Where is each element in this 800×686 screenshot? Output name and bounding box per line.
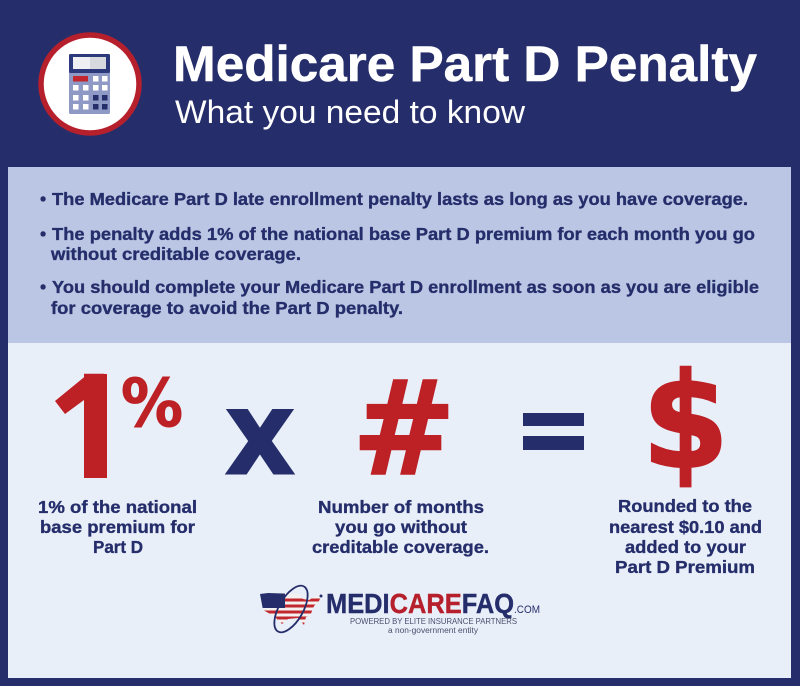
logo tagline: POWERED BY ELITE INSURANCE PARTNERS <box>350 617 518 626</box>
text: enroll as soon as eligible: You should complete your Medicare Part D enrollment as soon as you are eligible <box>52 277 759 297</box>
caption: rounded: Rounded to the <box>618 496 752 516</box>
text: enroll as soon as eligible <box>51 277 759 318</box>
caption: months: Number of months <box>318 497 484 517</box>
caption: one percent <box>38 497 197 557</box>
one percent symbol <box>55 374 182 478</box>
bullet 1: • <box>40 189 46 209</box>
logo .com: .COM <box>514 604 540 616</box>
caption: one percent: base premium for <box>40 517 195 537</box>
caption: one percent: Part D <box>93 537 143 557</box>
dollar sign: $ <box>642 345 729 499</box>
bullet 3: • <box>40 277 46 297</box>
logo disclaimer: a non-government entity <box>388 626 478 635</box>
multiply sign: x <box>224 364 296 502</box>
panel: key facts <box>8 167 791 343</box>
subtitle: What you need to know <box>175 94 526 130</box>
number sign: # <box>352 352 456 505</box>
caption: months <box>312 497 489 557</box>
text: enroll as soon as eligible: for coverage to avoid the Part D penalty. <box>51 298 403 318</box>
text: penalty amount: The penalty adds 1% of the national base Part D premium for each month you go <box>52 224 755 244</box>
text: lasts as long as coverage: The Medicare Part D late enrollment penalty lasts as long as you have coverage. <box>52 189 748 209</box>
text: penalty amount: without creditable coverage. <box>50 244 301 264</box>
equals sign <box>523 413 584 450</box>
logo: MedicareFAQ <box>260 584 540 634</box>
one percent symbol: 1 <box>44 345 135 512</box>
caption: months: you go without <box>335 517 467 537</box>
one percent symbol: % <box>121 365 183 442</box>
caption: rounded <box>609 496 762 577</box>
caption: rounded: nearest $0.10 and <box>609 517 762 537</box>
caption: one percent: 1% of the national <box>38 497 197 517</box>
text: penalty amount <box>50 224 755 264</box>
bullet 2: • <box>40 224 46 244</box>
caption: rounded: added to your <box>625 537 746 557</box>
panel: formula <box>8 343 791 678</box>
icon: calculator badge <box>41 35 139 133</box>
caption: rounded: Part D Premium <box>615 557 755 577</box>
caption: months: creditable coverage. <box>312 537 489 557</box>
title: Medicare Part D Penalty <box>173 36 757 92</box>
logo wordmark: MEDICAREFAQ <box>326 588 514 619</box>
icon: US map with orbit <box>260 584 322 634</box>
